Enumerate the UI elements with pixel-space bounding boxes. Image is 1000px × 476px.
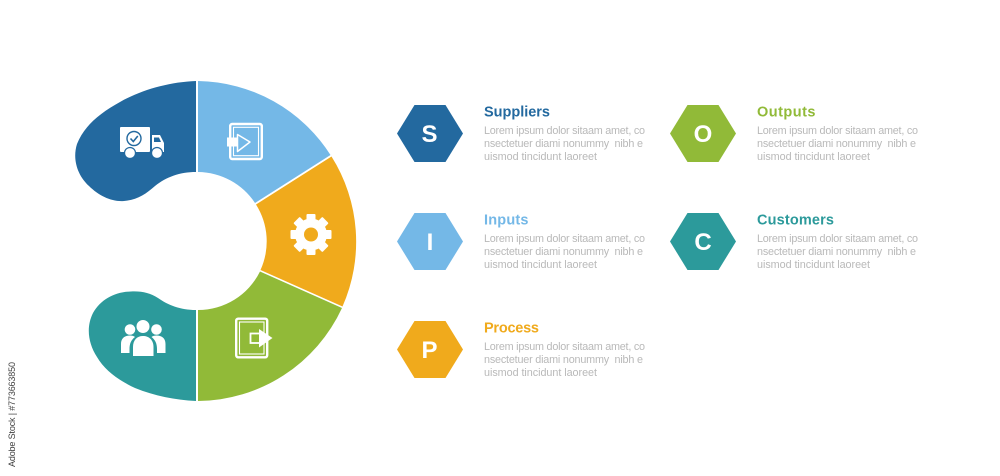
heading: Suppliers: Suppliers: [484, 104, 550, 120]
icon: gear: [290, 214, 332, 255]
hexagon S: S: [421, 121, 438, 148]
text block: Customers: Lorem ipsum dolor sitaam amet, co: [757, 233, 918, 245]
hexagon P: P: [421, 337, 438, 364]
heading: Inputs: Inputs: [484, 212, 528, 228]
icon: input document: [227, 124, 262, 159]
heading: Process: Process: [484, 320, 539, 336]
hexagon C: C: [694, 229, 712, 256]
text block: Suppliers: uismod tincidunt laoreet: [484, 151, 597, 163]
item: Suppliers: [397, 104, 645, 163]
heading: Customers: Customers: [757, 212, 834, 228]
text block: Process: Lorem ipsum dolor sitaam amet, co: [484, 341, 645, 353]
text block: Process: uismod tincidunt laoreet: [484, 367, 597, 379]
item: Process: [397, 320, 645, 379]
segment: inputs: [198, 81, 330, 203]
icon: delivery truck: [120, 127, 164, 158]
text block: Inputs: uismod tincidunt laoreet: [484, 259, 597, 271]
segment: outputs: [198, 272, 342, 401]
text block: Customers: uismod tincidunt laoreet: [757, 259, 870, 271]
hexagon C: [670, 213, 736, 270]
text block: Outputs: nsectetuer diami nonummy nibh e: [757, 138, 916, 150]
item: Inputs: [397, 212, 645, 271]
icon: people group: [121, 320, 166, 356]
segment: process: [256, 156, 356, 306]
hexagon I: [397, 213, 463, 270]
item: Outputs: [670, 104, 918, 163]
hexagon S: [397, 105, 463, 162]
text block: Inputs: Lorem ipsum dolor sitaam amet, co: [484, 233, 645, 245]
hexagon P: [397, 321, 463, 378]
segment: suppliers: [75, 81, 196, 201]
heading: Outputs: Outputs: [757, 104, 816, 120]
text block: Inputs: nsectetuer diami nonummy nibh e: [484, 246, 643, 258]
item: Customers: [670, 212, 918, 271]
text block: Customers: nsectetuer diami nonummy nibh e: [757, 246, 916, 258]
hexagon O: [670, 105, 736, 162]
hexagon O: O: [694, 121, 712, 148]
text block: Outputs: uismod tincidunt laoreet: [757, 151, 870, 163]
text block: Suppliers: Lorem ipsum dolor sitaam amet, co: [484, 125, 645, 137]
icon: output document: [236, 319, 272, 357]
text block: Suppliers: nsectetuer diami nonummy nibh e: [484, 138, 643, 150]
segment: customers: [89, 291, 196, 401]
hexagon I: I: [427, 229, 433, 256]
stock credit: Adobe Stock | #773663850: [7, 362, 17, 467]
panel: segmented ring diagram: [75, 81, 356, 401]
text block: Process: nsectetuer diami nonummy nibh e: [484, 354, 643, 366]
text block: Outputs: Lorem ipsum dolor sitaam amet, co: [757, 125, 918, 137]
